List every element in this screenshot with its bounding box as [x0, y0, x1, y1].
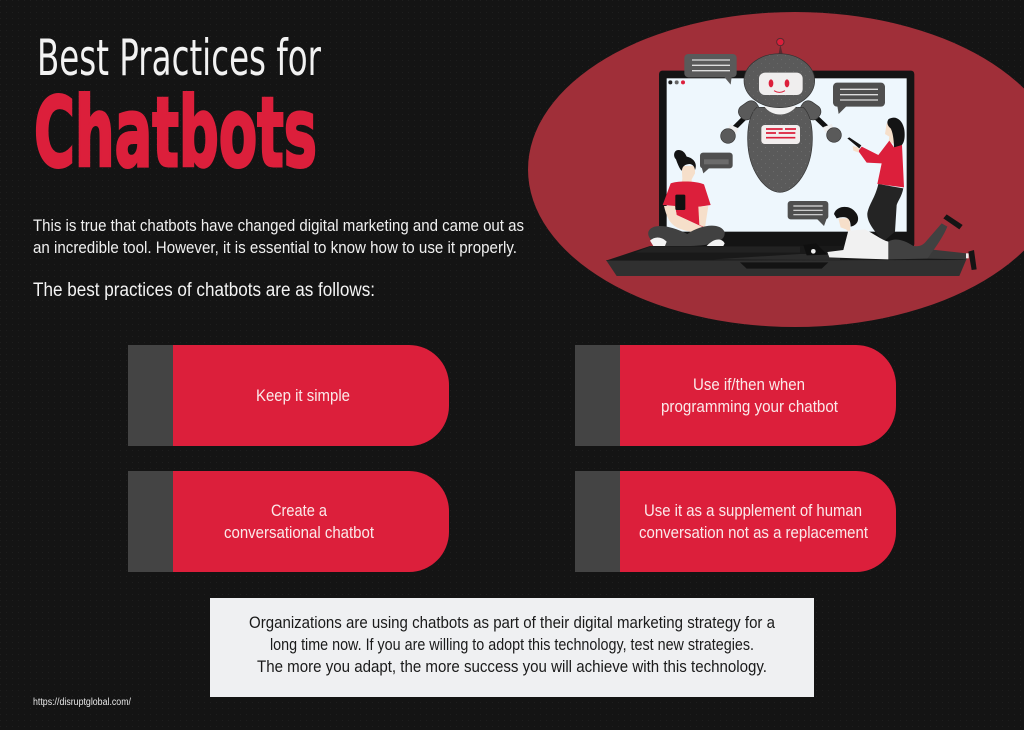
speech bubble top left	[684, 54, 737, 85]
intro text: an incredible tool. However, it is essential to know how to use it properly.	[33, 238, 517, 257]
card: Create a conversational chatbot: Create a	[271, 502, 328, 520]
subheading: The best practices of chatbots are as follows:	[33, 280, 375, 301]
robot head	[744, 54, 815, 108]
card: Use if/then: programming your chatbot	[661, 398, 838, 416]
card: Use it as a supplement: conversation not as a replacement	[639, 524, 868, 542]
speech bubble top right	[833, 83, 885, 114]
speech bubble lower	[788, 201, 828, 226]
card: Use it as a supplement	[575, 471, 896, 572]
card: Keep it simple: Keep it simple	[256, 387, 350, 405]
intro text	[33, 216, 524, 257]
illustration: robot and people on laptop	[528, 12, 1024, 327]
card: Keep it simple	[128, 345, 449, 446]
robot chest panel	[761, 125, 800, 144]
card: Use if/then	[575, 345, 896, 446]
robot	[721, 38, 841, 192]
title line: Chatbots: Chatbots	[34, 77, 317, 189]
title line: Best Practices for: Best Practices for	[37, 29, 321, 87]
laptop base	[606, 246, 967, 276]
card: Use it as a supplement: Use it as a supplement of human	[644, 502, 862, 520]
red ellipse backdrop	[528, 12, 1024, 327]
robot arms	[721, 98, 841, 143]
robot antenna	[777, 38, 784, 55]
conclusion box: Organizations are using chatbots as part of their digital marketing strategy for a	[249, 614, 776, 632]
conclusion box: long time now. If you are willing to adopt this technology, test new strategies.	[270, 636, 754, 654]
person: seated with phone	[648, 150, 725, 246]
laptop screen	[659, 71, 914, 247]
speech bubble small left	[700, 153, 733, 173]
conclusion box: The more you adapt, the more success you will achieve with this technology.	[257, 658, 767, 676]
intro text: This is true that chatbots have changed digital marketing and came out as	[33, 216, 524, 235]
robot neck	[764, 106, 797, 114]
card: Use if/then: Use if/then when	[693, 376, 805, 394]
person: lying with laptop	[803, 207, 977, 270]
title	[34, 29, 321, 189]
conclusion box	[210, 598, 814, 697]
robot body	[748, 107, 812, 192]
card: Create a conversational chatbot: conversational chatbot	[224, 524, 374, 542]
source url: https://disruptglobal.com/	[33, 697, 131, 708]
robot face	[759, 73, 803, 95]
card: Create a conversational chatbot	[128, 471, 449, 572]
person: standing woman	[847, 118, 905, 242]
